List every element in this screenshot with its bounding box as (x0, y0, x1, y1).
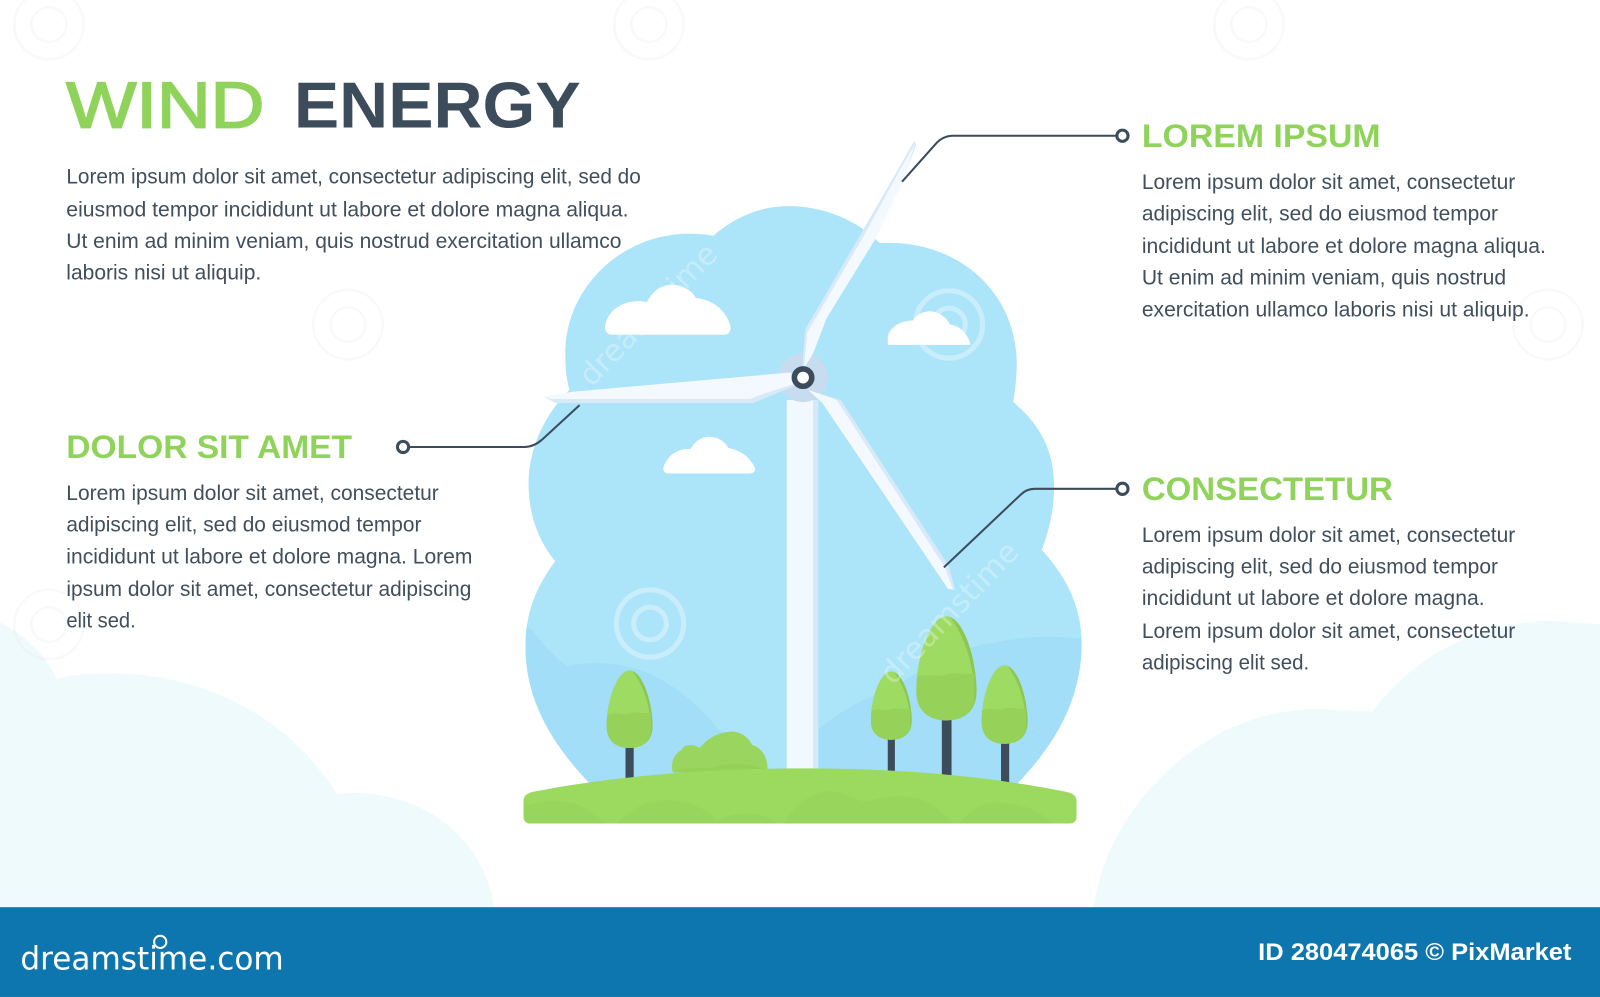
small cloud 2 (888, 311, 970, 345)
tower (787, 400, 818, 772)
leader line (409, 405, 580, 447)
body text: Lorem ipsum dolor sit amet, consectetur (1142, 524, 1515, 547)
bush (672, 732, 767, 776)
body text: Ut enim ad minim veniam, quis nostrud (1142, 267, 1506, 290)
body text: Lorem ipsum dolor sit amet, consectetur (1142, 620, 1515, 643)
intro text block: eiusmod tempor incididunt ut labore et dolore magna aliqua. (66, 198, 629, 221)
sky cloud shape (526, 206, 1082, 791)
body text: incididunt ut labore et dolore magna aliqua. (1142, 235, 1546, 258)
body text: adipiscing elit, sed do eiusmod tempor (1142, 555, 1498, 578)
title: ENERGY (294, 69, 581, 142)
body text: Lorem ipsum dolor sit amet, consectetur (1142, 171, 1515, 194)
intro text block: Lorem ipsum dolor sit amet, consectetur adipiscing elit, sed do (66, 166, 641, 189)
small cloud 1 (605, 285, 731, 335)
body text (1142, 524, 1515, 674)
footer logo: dreamstime.com (20, 941, 284, 977)
callout: lorem ipsum (902, 117, 1546, 321)
body text: exercitation ullamco laboris nisi ut aliquip. (1142, 298, 1530, 321)
title (66, 69, 581, 142)
heading: DOLOR SIT AMET (66, 428, 352, 465)
hub halo (779, 353, 828, 402)
callout: dolor sit amet (66, 405, 580, 633)
footer bar (0, 907, 1600, 997)
body text: incididunt ut labore et dolore magna. (1142, 587, 1485, 610)
tree 4 (982, 665, 1028, 786)
intro text block (66, 166, 641, 285)
body text: Lorem ipsum dolor sit amet, consectetur (66, 482, 439, 505)
background cloud: left (0, 622, 494, 907)
body text: incididunt ut labore et dolore magna. Lorem (66, 545, 472, 568)
body text: adipiscing elit, sed do eiusmod tempor (66, 514, 421, 537)
body text: ipsum dolor sit amet, consectetur adipiscing (66, 578, 471, 601)
body text (1142, 171, 1546, 321)
ground (523, 768, 1077, 824)
leader dot (1117, 483, 1128, 494)
intro text block: laboris nisi ut aliquip. (66, 262, 261, 285)
panel: wind turbine illustration (520, 141, 1087, 824)
heading: LOREM IPSUM (1142, 117, 1381, 154)
hub (794, 369, 812, 386)
body text: adipiscing elit, sed do eiusmod tempor (1142, 202, 1498, 225)
small cloud 3 (663, 437, 755, 474)
leader line (944, 489, 1116, 567)
watermark marks: dreamstime (572, 237, 725, 393)
leader dot (397, 441, 409, 453)
tree 3 (916, 616, 977, 778)
body text (66, 482, 472, 633)
intro text block: Ut enim ad minim veniam, quis nostrud exercitation ullamco (66, 230, 621, 253)
watermark marks: dreamstime (873, 535, 1026, 691)
blade: right (808, 390, 955, 590)
icon: spiral (154, 936, 166, 948)
hills (526, 626, 1082, 784)
background cloud: right (1094, 620, 1600, 907)
heading: CONSECTETUR (1142, 470, 1393, 507)
tree 1 (607, 670, 653, 781)
title: WIND (66, 69, 264, 142)
body text: elit sed. (66, 610, 136, 633)
footer credit: ID 280474065 © PixMarket (1258, 939, 1571, 966)
blade: left (544, 372, 795, 403)
watermark marks (14, 0, 1583, 691)
body text: adipiscing elit sed. (1142, 651, 1309, 674)
tree 2 (871, 671, 912, 774)
leader line (902, 136, 1116, 182)
leader dot (1117, 130, 1128, 141)
callout: consectetur (944, 470, 1515, 674)
blade: up (802, 141, 916, 369)
